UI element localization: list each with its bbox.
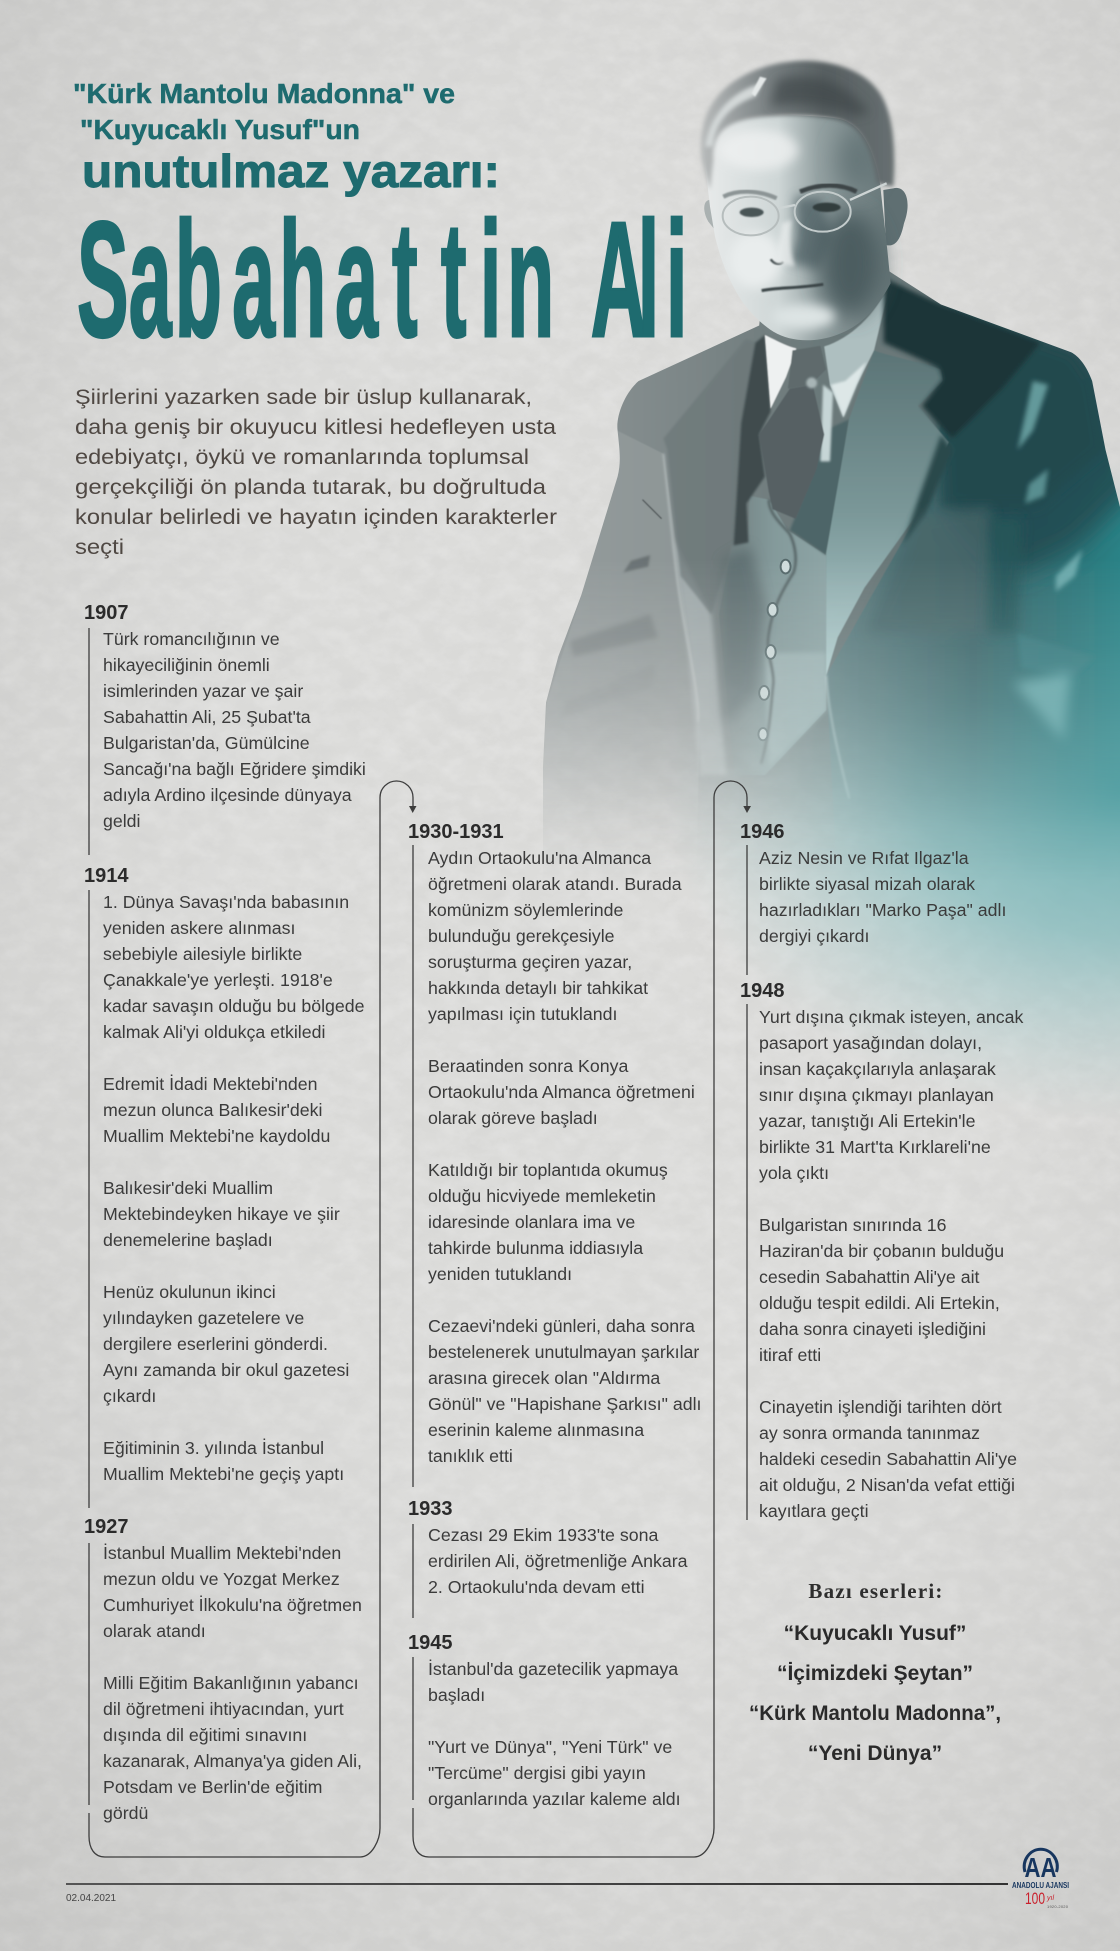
text: 1946: Aziz Nesin ve Rıfat Ilgaz'la [759,848,969,868]
text: 1914: Muallim Mektebi'ne kaydoldu [103,1126,330,1146]
text: 1927: olarak atandı [103,1621,206,1641]
text: 1948: kayıtlara geçti [759,1501,869,1521]
text: 1914: mezun olunca Balıkesir'deki [103,1100,322,1120]
text: 1948: cesedin Sabahattin Ali'ye ait [759,1267,980,1287]
list of works: “İçimizdeki Şeytan” [777,1662,973,1685]
timeline column 2 [408,821,701,1809]
text: 1907: adıyla Ardino ilçesinde dünyaya [103,785,352,805]
text: 1907 [103,629,366,831]
logo: Anadolu Ajansi: AA [1024,1852,1056,1883]
logo: Anadolu Ajansi: ANADOLU AJANSI [1012,1880,1069,1890]
year 1930-1931: 1930-1931 [408,821,504,843]
text: 1914: Mektebindeyken hikaye ve şiir [103,1204,340,1224]
intro paragraph: konular belirledi ve hayatın içinden karakterler [75,505,557,529]
text: 1948 [759,1007,1024,1521]
logo: Anadolu Ajansi: 1920-2020 [1047,1904,1069,1909]
intro paragraph: gerçekçiliği ön planda tutarak, bu doğrultuda [75,475,546,499]
text: 1948: birlikte 31 Mart'ta Kırklareli'ne [759,1137,991,1157]
text: 1933: erdirilen Ali, öğretmenliğe Ankara [428,1551,688,1571]
text: 1914: Edremit İdadi Mektebi'nden [103,1074,318,1094]
text: 1930-1931: komünizm söylemlerinde [428,900,623,920]
text: 1930-1931: idaresinde olanlara ima ve [428,1212,635,1232]
text: 1930-1931: bulunduğu gerekçesiyle [428,926,615,946]
year 1933: 1933 [408,1498,452,1520]
text: 1914: denemelerine başladı [103,1230,273,1250]
intro paragraph: edebiyatçı, öykü ve romanlarında toplumsal [75,445,529,469]
year 1927: 1927 [84,1516,128,1538]
logo: Anadolu Ajansi [1012,1849,1069,1909]
logo: Anadolu Ajansi: 100 [1025,1889,1045,1908]
text: 1914: yeniden askere alınması [103,918,295,938]
list of works [749,1622,1001,1765]
text: 1948: pasaport yasağından dolayı, [759,1033,982,1053]
subtitle line three: unutulmaz yazarı: [82,145,500,197]
text: 1914: kadar savaşın olduğu bu bölgede [103,996,365,1016]
text: 1914: Eğitiminin 3. yılında İstanbul [103,1438,324,1458]
timeline column 1 [84,602,366,1823]
text: 1927: Potsdam ve Berlin'de eğitim [103,1777,322,1797]
text: 1907: Sabahattin Ali, 25 Şubat'ta [103,707,311,727]
list of works: “Kürk Mantolu Madonna”, [749,1702,1001,1725]
text: 1914: yılındayken gazetelere ve [103,1308,304,1328]
year 1948: 1948 [740,980,784,1002]
text: 1930-1931: Katıldığı bir toplantıda okumuş [428,1160,668,1180]
portrait: suit and body [543,272,1120,846]
text: 1948: ay sonra ormanda tanınmaz [759,1423,980,1443]
text: 1948: yola çıktı [759,1163,829,1183]
text: 1927: dışında dil eğitimi sınavını [103,1725,307,1745]
text: 1946: hazırladıkları "Marko Paşa" adlı [759,900,1006,920]
icon: waistcoat buttons [758,560,791,740]
subtitle line one: "Kürk Mantolu Madonna" ve [73,78,455,109]
text: 1948: Yurt dışına çıkmak isteyen, ancak [759,1007,1024,1027]
intro paragraph: daha geniş bir okuyucu kitlesi hedefleyen usta [75,415,556,439]
text: 1927: kazanarak, Almanya'ya giden Ali, [103,1751,362,1771]
text: 1914: Henüz okulunun ikinci [103,1282,276,1302]
logo: Anadolu Ajansi: yıl [1046,1895,1054,1902]
text: 1933: 2. Ortaokulu'nda devam etti [428,1577,645,1597]
text: 1948: ait olduğu, 2 Nisan'da vefat ettiği [759,1475,1015,1495]
text: 1907: Sancağı'na bağlı Eğridere şimdiki [103,759,366,779]
text: 1946: dergiyi çıkardı [759,926,870,946]
text: 1907: Bulgaristan'da, Gümülcine [103,733,310,753]
text: 1930-1931: soruşturma geçiren yazar, [428,952,632,972]
text: 1930-1931: öğretmeni olarak atandı. Burada [428,874,682,894]
text: 1945: "Yurt ve Dünya", "Yeni Türk" ve [428,1737,672,1757]
text: 1914: dergilere eserlerini gönderdi. [103,1334,328,1354]
text: 1948: itiraf etti [759,1345,821,1365]
text: 1948: haldeki cesedin Sabahattin Ali'ye [759,1449,1017,1469]
text: 1927: İstanbul Muallim Mektebi'nden [103,1543,341,1563]
text: 1948: Bulgaristan sınırında 16 [759,1215,947,1235]
text: 1948: daha sonra cinayeti işlediğini [759,1319,986,1339]
text: 1948: Cinayetin işlendiği tarihten dört [759,1397,1002,1417]
arrow: to 1930-1931 [409,806,416,813]
text: 1907: geldi [103,811,141,831]
text: 1930-1931 [428,848,701,1466]
text: 1930-1931: Gönül" ve "Hapishane Şarkısı" adlı [428,1394,701,1414]
portrait: Sabahattin Ali photo illustration [520,61,1120,890]
text: 1914 [103,892,365,1484]
date: 02.04.2021 [66,1893,116,1904]
text: 1927 [103,1543,362,1823]
text: 1948: Haziran'da bir çobanın bulduğu [759,1241,1004,1261]
panel: selected works [749,1579,1001,1765]
text: 1914: çıkardı [103,1386,156,1406]
intro paragraph [75,385,557,559]
text: 1927: gördü [103,1803,148,1823]
intro paragraph: Şiirlerini yazarken sade bir üslup kullanarak, [75,385,532,409]
text: 1948: yazar, tanıştığı Ali Ertekin'le [759,1111,976,1131]
footer rule [66,1883,1008,1885]
text: 1914: Muallim Mektebi'ne geçiş yaptı [103,1464,344,1484]
timeline column 3 [740,821,1024,1521]
text: 1914: kalmak Ali'yi oldukça etkiledi [103,1022,325,1042]
text: 1930-1931: Cezaevi'ndeki günleri, daha sonra [428,1316,695,1336]
list of works: “Yeni Dünya” [808,1742,942,1765]
text: 1930-1931: Beraatinden sonra Konya [428,1056,628,1076]
text: 1914: 1. Dünya Savaşı'nda babasının [103,892,349,912]
text: 1945: başladı [428,1685,485,1705]
text: 1914: Aynı zamanda bir okul gazetesi [103,1360,349,1380]
text: 1948: olduğu tespit edildi. Ali Ertekin, [759,1293,1000,1313]
text: 1930-1931: yapılması için tutuklandı [428,1004,617,1024]
text: 1946 [759,848,1006,946]
text: 1907: hikayeciliğinin önemli [103,655,270,675]
text: 1933 [428,1525,688,1597]
heading: Bazı eserleri: Bazı eserleri: [808,1579,944,1603]
text: 1930-1931: bestelenerek unutulmayan şarkılar [428,1342,699,1362]
text: 1927: dil öğretmeni ihtiyacından, yurt [103,1699,344,1719]
text: 1927: mezun oldu ve Yozgat Merkez [103,1569,340,1589]
year 1914: 1914 [84,865,129,887]
text: 1930-1931: Ortaokulu'nda Almanca öğretmeni [428,1082,695,1102]
text: 1945: organlarında yazılar kaleme aldı [428,1789,681,1809]
title: Sabahattin Ali: Sabahattin Ali [77,189,687,372]
title block [73,78,687,372]
intro paragraph: seçti [75,535,124,559]
text: 1914: Çanakkale'ye yerleşti. 1918'e [103,970,333,990]
text: 1907: Türk romancılığının ve [103,629,280,649]
year 1946: 1946 [740,821,784,843]
portrait: head [701,61,908,340]
text: 1907: isimlerinden yazar ve şair [103,681,303,701]
text: 1930-1931: Aydın Ortaokulu'na Almanca [428,848,651,868]
text: 1930-1931: yeniden tutuklandı [428,1264,572,1284]
text: 1930-1931: hakkında detaylı bir tahkikat [428,978,648,998]
text: 1930-1931: tahkirde bulunma iddiasıyla [428,1238,643,1258]
text: 1930-1931: arasına girecek olan "Aldırma [428,1368,660,1388]
text: 1948: sınır dışına çıkmayı planlayan [759,1085,994,1105]
text: 1930-1931: eserinin kaleme alınmasına [428,1420,644,1440]
text: 1914: Balıkesir'deki Muallim [103,1178,273,1198]
text: 1930-1931: tanıklık etti [428,1446,513,1466]
text: 1945 [428,1659,681,1809]
text: 1945: İstanbul'da gazetecilik yapmaya [428,1659,678,1679]
text: 1930-1931: olarak göreve başladı [428,1108,598,1128]
text: 1930-1931: olduğu hicviyede memleketin [428,1186,656,1206]
text: 1945: "Tercüme" dergisi gibi yayın [428,1763,646,1783]
text: 1946: birlikte siyasal mizah olarak [759,874,975,894]
timeline connector lines [89,628,751,1857]
year 1907: 1907 [84,602,128,624]
year 1945: 1945 [408,1632,452,1654]
subtitle line two: "Kuyucaklı Yusuf"un [80,114,360,145]
text: 1927: Cumhuriyet İlkokulu'na öğretmen [103,1595,362,1615]
list of works: “Kuyucaklı Yusuf” [784,1622,966,1645]
text: 1948: insan kaçakçılarıyla anlaşarak [759,1059,996,1079]
text: 1927: Milli Eğitim Bakanlığının yabancı [103,1673,359,1693]
arrow: to 1946 [743,806,751,813]
text: 1914: sebebiyle ailesiyle birlikte [103,944,302,964]
text: 1933: Cezası 29 Ekim 1933'te sona [428,1525,658,1545]
